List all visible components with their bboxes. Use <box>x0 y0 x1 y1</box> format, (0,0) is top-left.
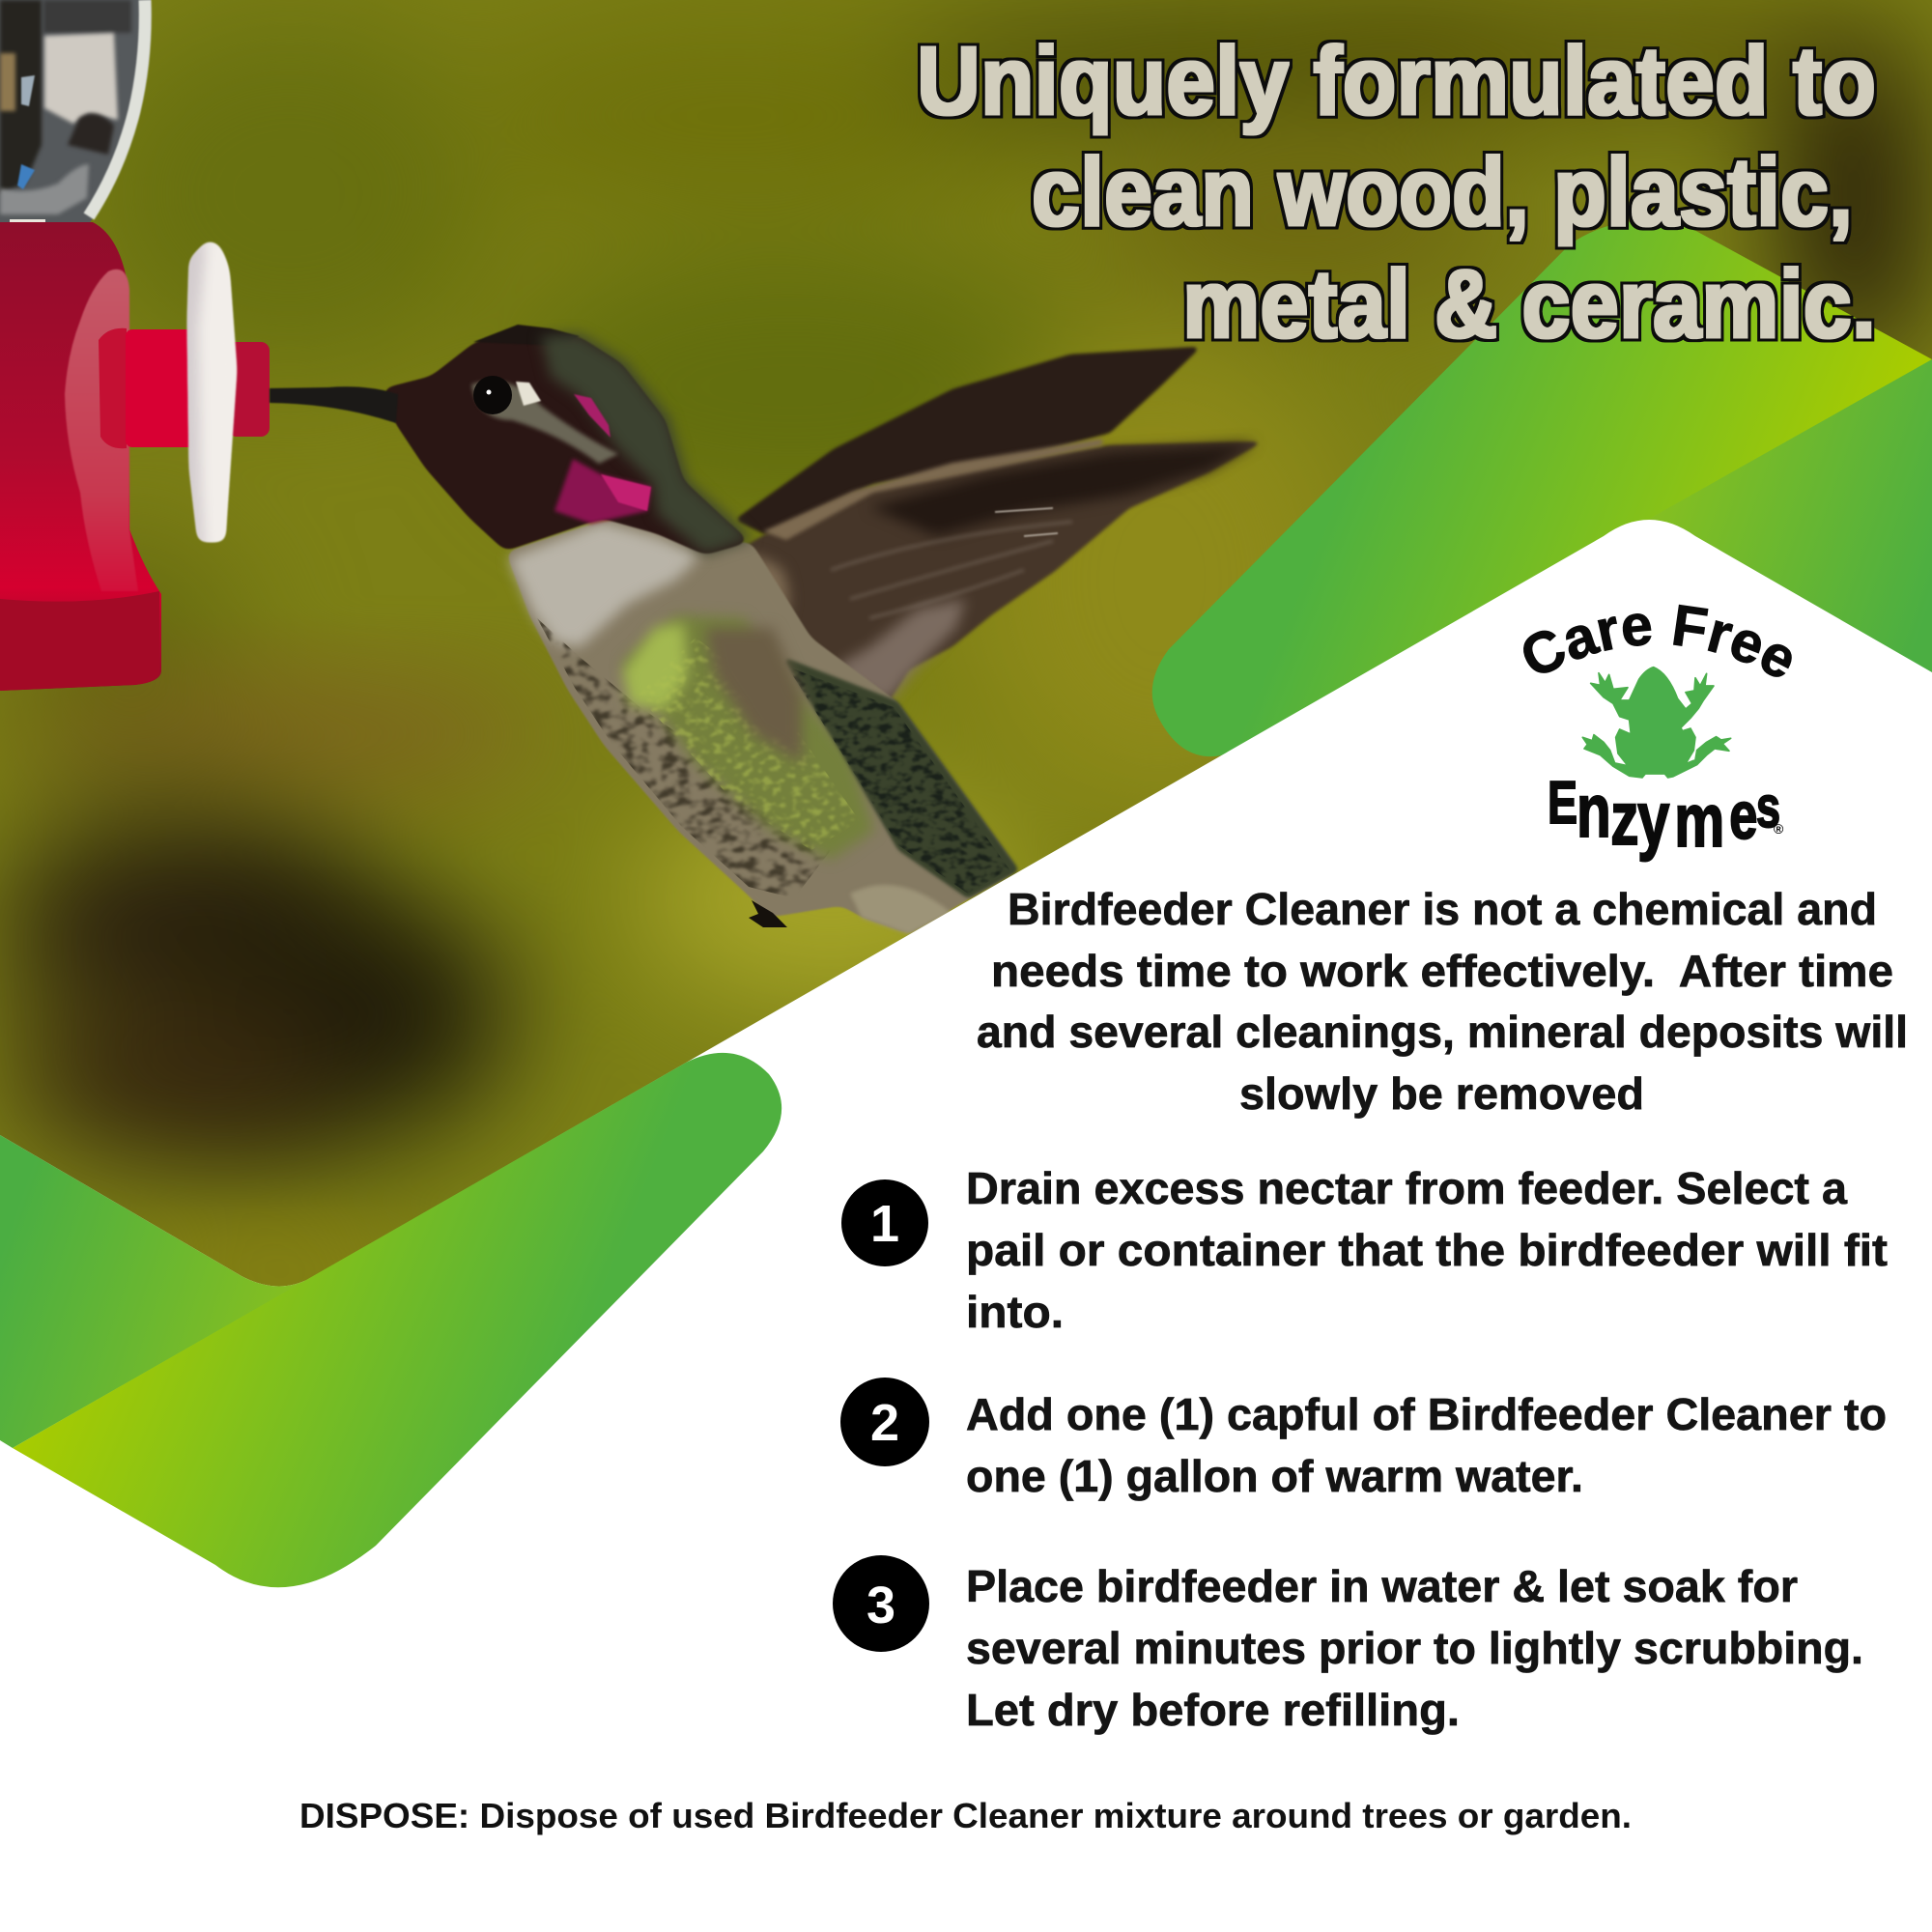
logo bottom wordmark: e <box>1729 779 1757 854</box>
feeder port nub <box>228 342 270 437</box>
step 1 text: Drain excess nectar from feeder. Select a <box>966 1163 1847 1213</box>
hummingbird body <box>505 512 1019 934</box>
title: clean wood, plastic, <box>1032 138 1853 246</box>
feeder red body <box>0 222 161 691</box>
speckled belly <box>537 618 831 898</box>
iridescent green flank <box>622 615 874 860</box>
brown tufts <box>705 628 802 763</box>
disposal note: DISPOSE: Dispose of used Birdfeeder Cleaner mixture around trees or garden. <box>299 1796 1632 1835</box>
step 1 number badge <box>841 1179 928 1266</box>
green cap and nape <box>541 334 752 554</box>
green accent lower left ribbon <box>13 1053 781 1587</box>
intro paragraph: Birdfeeder Cleaner is not a chemical and <box>1008 884 1877 934</box>
gorget magenta <box>554 459 651 524</box>
title: metal & ceramic. <box>1182 250 1876 358</box>
step 3 text: Let dry before refilling. <box>966 1685 1460 1735</box>
feeder stem <box>99 328 213 448</box>
step 3 number badge: 3 <box>867 1577 895 1634</box>
logo bottom wordmark: m <box>1674 779 1724 863</box>
feeder and hummingbird photo <box>0 0 1264 934</box>
step 1 text <box>966 1163 1888 1337</box>
logo bottom wordmark: s <box>1756 776 1780 840</box>
step 2 text <box>966 1389 1887 1501</box>
feeder glass bottle <box>0 0 151 226</box>
dark green back <box>782 657 1019 898</box>
step 2 <box>840 1378 1887 1501</box>
step 2 text: one (1) gallon of warm water. <box>966 1451 1583 1501</box>
green accent left band <box>0 1135 314 1448</box>
step 2 number badge <box>840 1378 929 1466</box>
step 1 number badge: 1 <box>870 1195 899 1253</box>
step 3 text: several minutes prior to lightly scrubbing. <box>966 1623 1863 1673</box>
step 1 <box>841 1163 1888 1337</box>
crest <box>473 325 580 346</box>
icon: green frog <box>1582 668 1731 778</box>
white eye spot <box>516 382 541 406</box>
intro paragraph: and several cleanings, mineral deposits will <box>977 1007 1908 1057</box>
white throat <box>509 522 700 647</box>
step 2 text: Add one (1) capful of Birdfeeder Cleaner to <box>966 1389 1887 1439</box>
logo bottom wordmark: z <box>1610 777 1638 861</box>
logo: Care Free Enzymes <box>1523 605 1792 863</box>
ear patch <box>574 394 611 438</box>
step 1 text: pail or container that the birdfeeder will fit <box>966 1225 1888 1275</box>
rump <box>850 885 952 934</box>
face stripe <box>471 381 618 464</box>
hummingbird wings <box>715 347 1264 707</box>
logo bottom wordmark: n <box>1577 769 1611 853</box>
intro paragraph: slowly be removed <box>1239 1068 1644 1119</box>
step 3 number badge <box>833 1555 929 1652</box>
title <box>917 27 1876 358</box>
logo bottom wordmark: y <box>1637 776 1669 862</box>
photo background: blurred foliage <box>0 0 1932 1449</box>
step 3 <box>833 1555 1863 1735</box>
white flower guard <box>186 240 238 543</box>
foot <box>749 900 787 927</box>
green accent top right <box>1152 221 1932 756</box>
logo bottom wordmark: E <box>1548 768 1577 837</box>
white content panel <box>0 520 1932 1932</box>
registered mark: ® <box>1774 821 1784 837</box>
hummingbird head and gorget <box>382 325 752 555</box>
step 3 text: Place birdfeeder in water & let soak for <box>966 1561 1798 1611</box>
logo top wordmark: Care Free <box>1523 605 1792 677</box>
step 1 text: into. <box>966 1287 1064 1337</box>
hummingbird beak <box>270 386 398 423</box>
step 3 text <box>966 1561 1863 1735</box>
eye <box>473 376 512 414</box>
step 2 number badge: 2 <box>870 1394 899 1452</box>
intro paragraph: needs time to work effectively. After time <box>991 946 1893 996</box>
intro paragraph <box>977 884 1908 1119</box>
